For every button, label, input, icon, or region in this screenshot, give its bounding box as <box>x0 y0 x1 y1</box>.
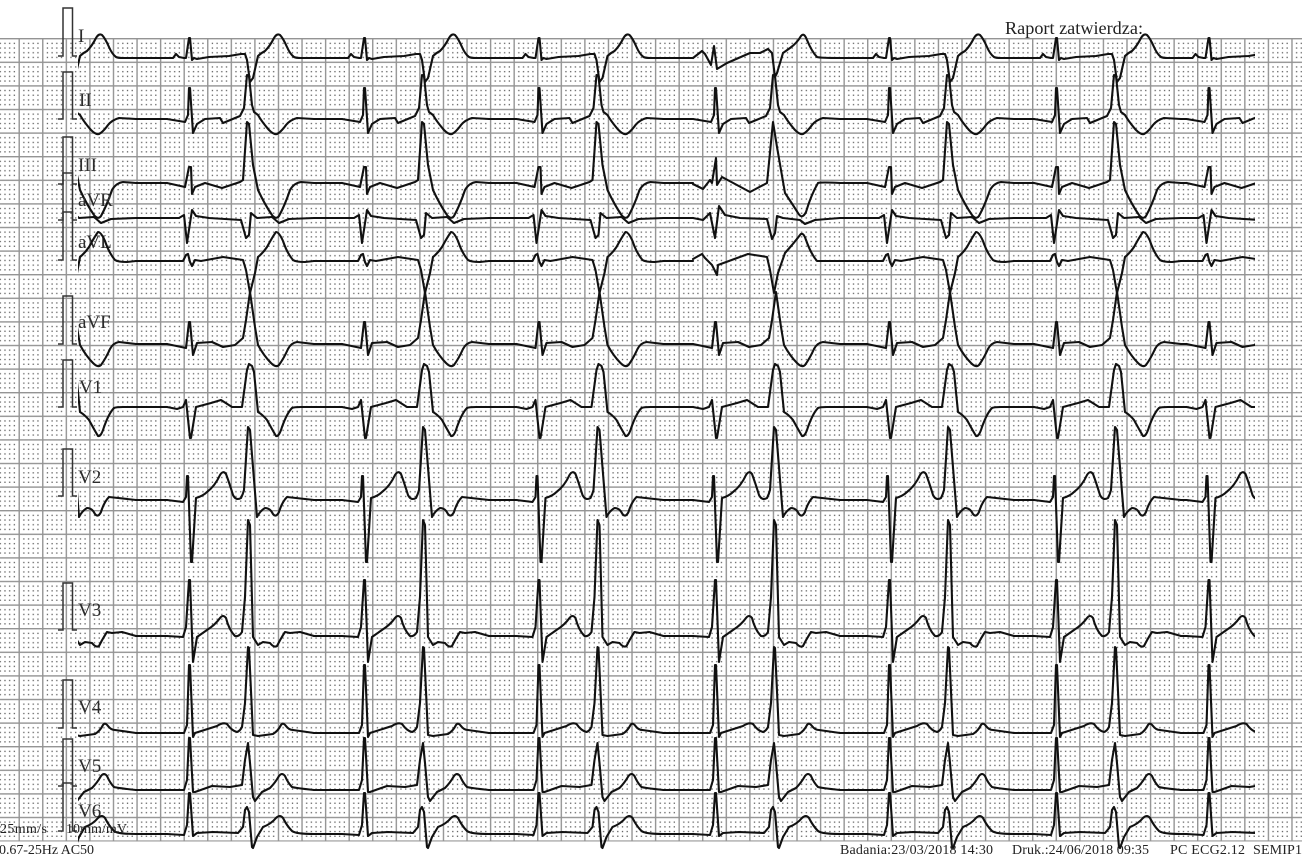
label I: I <box>78 26 84 47</box>
calibration pulse I <box>58 8 77 56</box>
calibration pulse V1 <box>58 360 77 407</box>
waveform V5 <box>0 738 1302 801</box>
calibration pulse V4 <box>58 680 77 728</box>
paper speed: 25mm/s <box>0 822 47 837</box>
label V2: V2 <box>78 467 101 488</box>
label V6: V6 <box>78 801 101 822</box>
label V3: V3 <box>78 600 101 621</box>
lead V4 <box>0 647 1302 737</box>
label V4: V4 <box>78 697 102 718</box>
print date: Druk.:24/06/2018 09:35 <box>1012 843 1149 858</box>
approval text: Raport zatwierdza: <box>1005 18 1143 38</box>
lead I <box>0 8 1302 82</box>
label aVR: aVR <box>78 190 113 211</box>
lead V5 <box>0 738 1302 801</box>
lead II <box>0 72 1302 134</box>
waveform V6 <box>0 793 1302 848</box>
filter settings: 0.67-25Hz AC50 <box>0 843 94 858</box>
waveform aVL <box>0 232 1302 293</box>
calibration pulse V5 <box>58 739 77 786</box>
label II: II <box>79 90 92 111</box>
waveform V1 <box>0 364 1302 438</box>
waveform V2 <box>0 427 1302 562</box>
calibration pulse V3 <box>58 583 77 630</box>
label aVL: aVL <box>78 232 112 253</box>
lead III <box>0 122 1302 218</box>
calibration pulse II <box>58 72 77 119</box>
lead V2 <box>0 427 1302 562</box>
waveform III <box>0 122 1302 218</box>
calibration pulse III <box>58 137 77 184</box>
lead V3 <box>0 520 1302 662</box>
waveform aVF <box>0 292 1302 366</box>
lead aVL <box>0 212 1302 293</box>
lead V6 <box>0 783 1302 848</box>
label V5: V5 <box>78 756 101 777</box>
waveform I <box>0 34 1302 82</box>
software version: PC ECG2.12 <box>1170 843 1245 858</box>
exam date: Badania:23/03/2018 14:30 <box>840 843 993 858</box>
lead V1 <box>0 360 1302 438</box>
label aVF: aVF <box>78 312 111 333</box>
lead aVR <box>0 173 1302 243</box>
waveform V3 <box>0 520 1302 662</box>
waveform V4 <box>0 647 1302 737</box>
amplitude gain: 10mm/mV <box>66 822 127 837</box>
device id: SEMIP1 <box>1253 843 1302 858</box>
label V1: V1 <box>79 377 102 398</box>
calibration pulse aVL <box>58 212 77 260</box>
waveform aVR <box>0 206 1302 243</box>
calibration pulse aVF <box>58 296 77 344</box>
calibration pulse V2 <box>58 449 77 496</box>
label III: III <box>78 155 97 176</box>
calibration pulse aVR <box>58 173 77 220</box>
calibration pulse V6 <box>58 783 77 831</box>
lead aVF <box>0 292 1302 366</box>
waveform II <box>0 75 1302 134</box>
